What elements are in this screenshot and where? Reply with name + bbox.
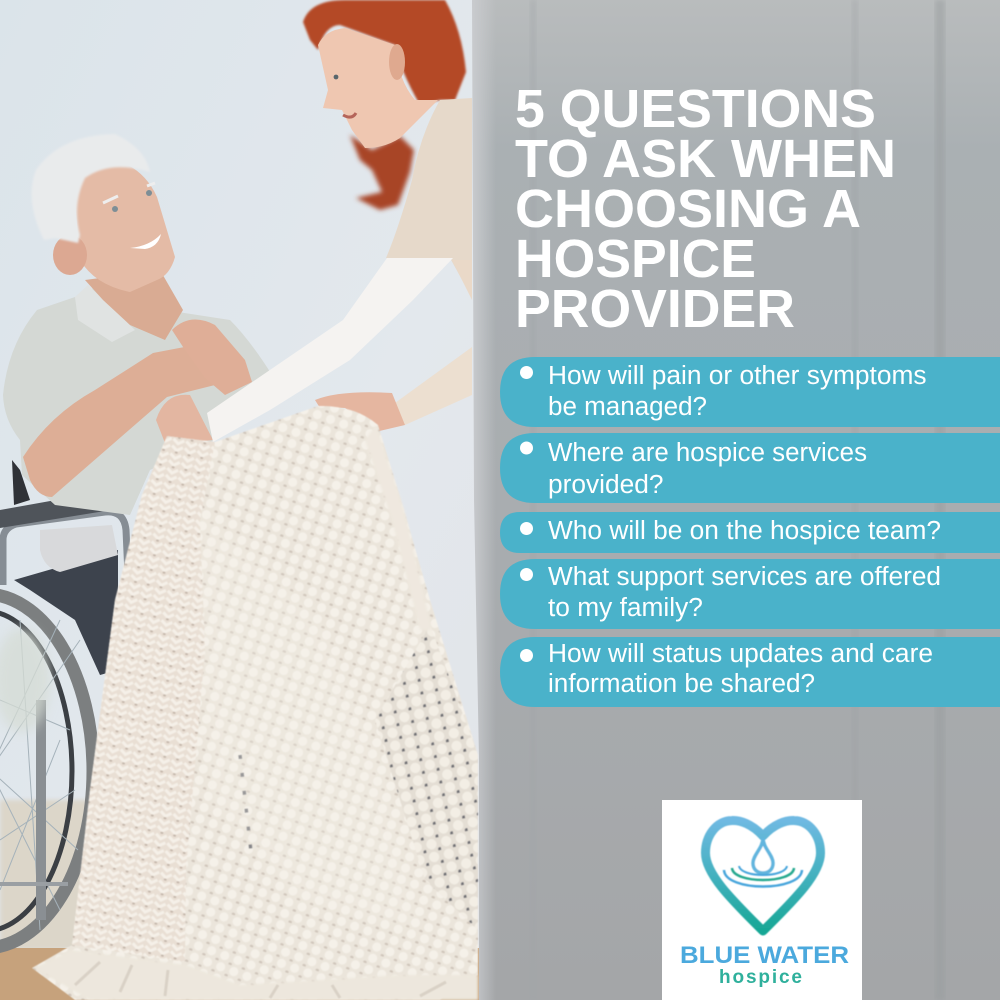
- woman: hand on blanket: [315, 392, 405, 432]
- man: arm and hands: [23, 345, 222, 497]
- title: CHOOSING A: [515, 179, 861, 239]
- title: TO ASK WHEN: [515, 129, 896, 189]
- question 4: to my family?: [548, 592, 703, 622]
- question 5: How will status updates and care: [548, 638, 933, 668]
- question 5: information be shared?: [548, 668, 815, 698]
- blanket: lace right section: [375, 625, 478, 930]
- man: neck: [85, 270, 183, 340]
- title: HOSPICE: [515, 229, 756, 289]
- man: head: [73, 160, 175, 292]
- title: 5 QUESTIONS: [515, 79, 876, 139]
- question 2: provided?: [548, 469, 664, 499]
- knitted blanket: [32, 406, 478, 1000]
- icon: heart with water drop: [706, 820, 820, 931]
- woman: face and neck: [318, 28, 438, 148]
- logo tagline: hospice: [719, 967, 802, 988]
- title: PROVIDER: [515, 279, 795, 339]
- man: [3, 134, 272, 515]
- panel: frosted door background: [460, 0, 1000, 1000]
- question 4: What support services are offered: [548, 561, 941, 591]
- question 3: Who will be on the hospice team?: [548, 515, 941, 545]
- question 2: Where are hospice services: [548, 437, 867, 467]
- question 1: be managed?: [548, 391, 707, 421]
- floor: [0, 800, 480, 1000]
- man: shirt: [3, 285, 272, 515]
- question 1: [500, 357, 1000, 427]
- wheelchair: [0, 460, 128, 948]
- question 1: How will pain or other symptoms: [548, 360, 927, 390]
- logo: Blue Water Hospice: [662, 800, 862, 1000]
- woman: hair: [303, 0, 466, 105]
- woman: white sleeve: [207, 258, 453, 442]
- photo: caregiver and man in wheelchair: [0, 0, 480, 1000]
- question 3: [500, 512, 1000, 553]
- blanket: fold highlight: [204, 534, 412, 917]
- question 4: [500, 559, 1000, 629]
- blanket: fringe: [34, 950, 478, 1000]
- question 2: [500, 433, 1000, 503]
- blanket: center dark seam: [240, 755, 252, 860]
- woman: tunic: [386, 98, 472, 277]
- man: hair: [32, 134, 150, 243]
- woman: lower hair strands: [350, 135, 414, 210]
- woman: [207, 0, 472, 442]
- blanket: left fold: [72, 436, 215, 962]
- blurred foreground plant: [0, 628, 50, 732]
- title: [515, 79, 896, 339]
- blanket: right border: [367, 432, 430, 628]
- question 5: [500, 637, 1000, 707]
- logo wordmark: BLUE WATER: [680, 942, 849, 969]
